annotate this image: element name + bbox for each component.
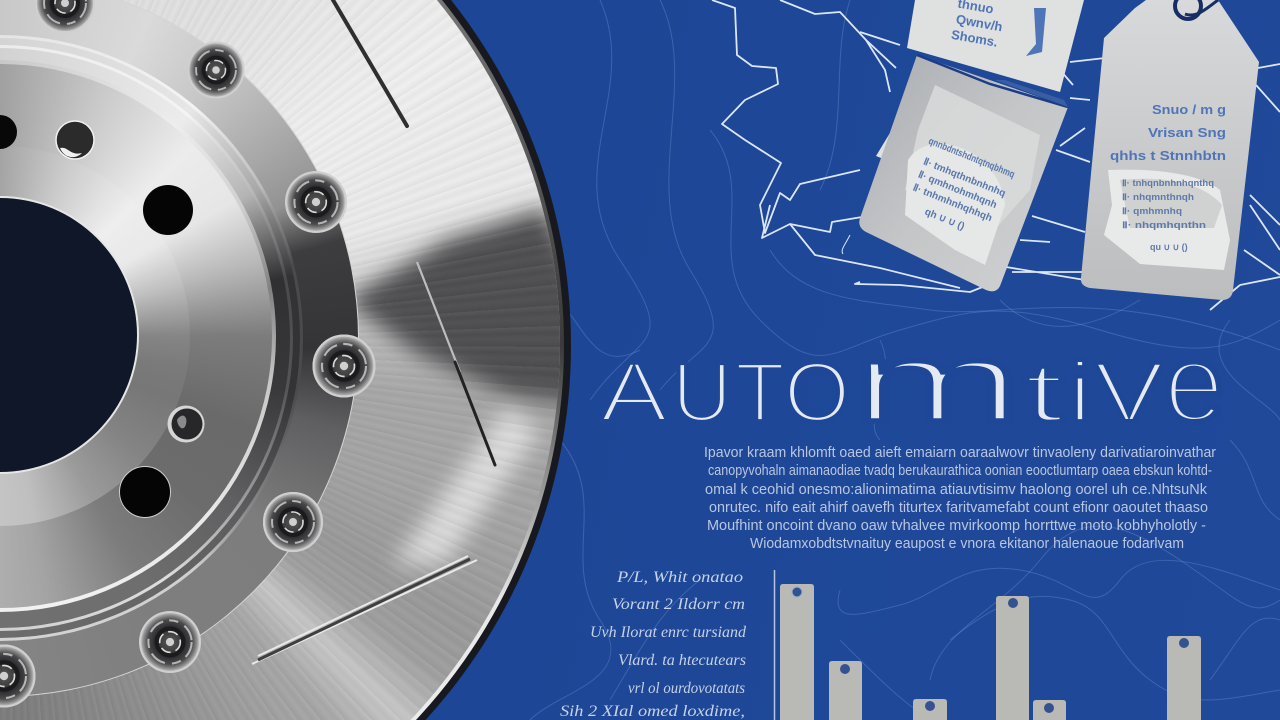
tag: right large tag: Ⅱ· nhqmnthnqh <box>1122 192 1194 202</box>
icon: small reflective hole <box>56 121 94 159</box>
bar 1 <box>780 584 814 720</box>
tag: right large tag: Ⅱ· qmhmnhq <box>1122 206 1182 216</box>
panel: hub face <box>0 64 272 608</box>
bar 4 <box>996 596 1029 720</box>
text block: chart category labels: vrl ol ourdovotatats <box>628 680 745 697</box>
text block: chart category labels: Vorant 2 Ildorr cm <box>612 596 745 613</box>
panel: hub shoulder <box>0 48 290 628</box>
bar 3 <box>913 699 947 720</box>
tag: right large tag <box>1081 0 1259 300</box>
tag: tilted middle tag: qh ∪ ∪ () <box>923 207 966 233</box>
panel: hub collar highlight <box>0 314 190 526</box>
brake disc illustration <box>0 0 571 720</box>
icon: tag hanging loop <box>1175 0 1218 19</box>
text block: chart category labels: P/L, Whit onatao <box>616 569 743 586</box>
panel: brushed texture overlay <box>123 0 559 720</box>
tag: right large tag: Vrisan Sng <box>1148 125 1226 140</box>
tag: tilted middle tag: Ⅱ· tnhmhnhqhhqh <box>911 182 994 224</box>
chart axis <box>774 570 776 720</box>
panel: hub outer line <box>0 35 303 641</box>
panel: bolt ring edge <box>28 0 359 696</box>
icon: bolt 3 <box>285 171 347 233</box>
text block: description paragraph: Ipavor kraam khlomft oaed aieft emaiarn oaraalwovr tinvaoleny darivatiaroinvathar <box>704 445 1216 461</box>
icon: left edge hole <box>0 115 17 149</box>
title: T <box>735 345 785 439</box>
panel: rotor shading <box>354 196 560 576</box>
title: e <box>1164 322 1224 445</box>
panel: hub center hole <box>0 198 137 472</box>
icon: bolt 4 <box>312 334 376 398</box>
tag: right large tag: qu ∪ ∪ () <box>1150 242 1188 252</box>
tag: top hanging tag <box>907 0 1084 92</box>
icon: bolt 2 <box>188 42 244 98</box>
bar 5 <box>1033 700 1066 720</box>
title: U <box>672 345 732 439</box>
text block: description paragraph: Moufhint oncoint dvano oaw tvhalvee mvirkoomp horrttwe moto kobhyholotly - <box>707 518 1206 534</box>
icon: small dark lower hole <box>168 406 204 442</box>
panel: hub second line <box>0 45 293 631</box>
panel: brushed rotor surface <box>0 0 560 720</box>
panel: hub white lip <box>0 60 276 612</box>
title: A <box>600 345 668 439</box>
title: i <box>1068 345 1092 439</box>
text block: chart category labels: Sih 2 XIal omed loxdime, <box>560 703 745 720</box>
icon: upper black hole <box>143 185 193 235</box>
title: t <box>1024 345 1064 439</box>
panel: hub hole lip <box>0 196 139 474</box>
panel: rotor bright rim <box>410 0 564 720</box>
bar 2 <box>829 661 862 720</box>
text block: chart category labels: Uvh Ilorat enrc tursiand <box>590 624 747 641</box>
panel: hub outer groove <box>0 38 300 638</box>
icon: bolt 1 <box>35 0 95 33</box>
tag: right large tag: qhhs t Stnnhbtn <box>1110 148 1226 163</box>
text block: description paragraph: omal k ceohid onesmo:alionimatima atiauvtisimv haolong oorel uh ce.NhtsuNk <box>705 482 1208 498</box>
panel: rotor outer edge <box>416 0 571 720</box>
text block: description paragraph: onrutec. nifo eait ahirf oavefh titurtex faritvamefabt count efionr oaoutet thaaso <box>709 500 1208 516</box>
tag: right large tag: Ⅱ· nhqmhqnthn <box>1122 220 1206 230</box>
tag: tilted middle tag: Ⅱ· tmhqthnbnhnhq <box>922 156 1007 200</box>
bar 6 <box>1167 636 1201 720</box>
title: V <box>1094 345 1164 439</box>
icon: bolt 7 <box>0 644 36 708</box>
tag: right large tag: Snuo / m g <box>1152 102 1226 117</box>
title: m <box>852 320 1022 445</box>
tag: top hanging tag: Qwnv/h <box>955 11 1004 34</box>
tag: tilted middle tag <box>859 55 1068 291</box>
text block: description paragraph: Wiodamxobdtstvnaituy eaupost e vnora ekitanor halenaoue fodarlvam <box>750 536 1184 552</box>
title: O <box>784 345 850 439</box>
slot: upper rotor groove <box>333 0 407 126</box>
text block: description paragraph: canopyvohaln aimanaodiae tvadq berukaurathica oonian eooctlumtarp oaea ebskun kohtd- <box>708 463 1212 479</box>
tag: right large tag: Ⅱ· tnhqnbnhnhqnthq <box>1122 178 1214 188</box>
icon: bolt 5 <box>263 492 323 552</box>
icon: bolt 6 <box>139 611 201 673</box>
panel: bolt ring band <box>0 0 358 695</box>
icon: lower black hole <box>120 466 170 518</box>
slot: middle rotor groove <box>417 262 495 465</box>
slot: lower rotor groove <box>252 556 477 664</box>
text block: chart category labels: Vlard. ta htecutears <box>618 652 746 669</box>
tag: tilted middle tag: qnnbdntshdntqtnqbhmq <box>927 136 1016 181</box>
tag: tilted middle tag: Ⅱ· qmhnohmhqnh <box>916 169 998 211</box>
tag: top hanging tag: Shoms. <box>950 27 999 50</box>
